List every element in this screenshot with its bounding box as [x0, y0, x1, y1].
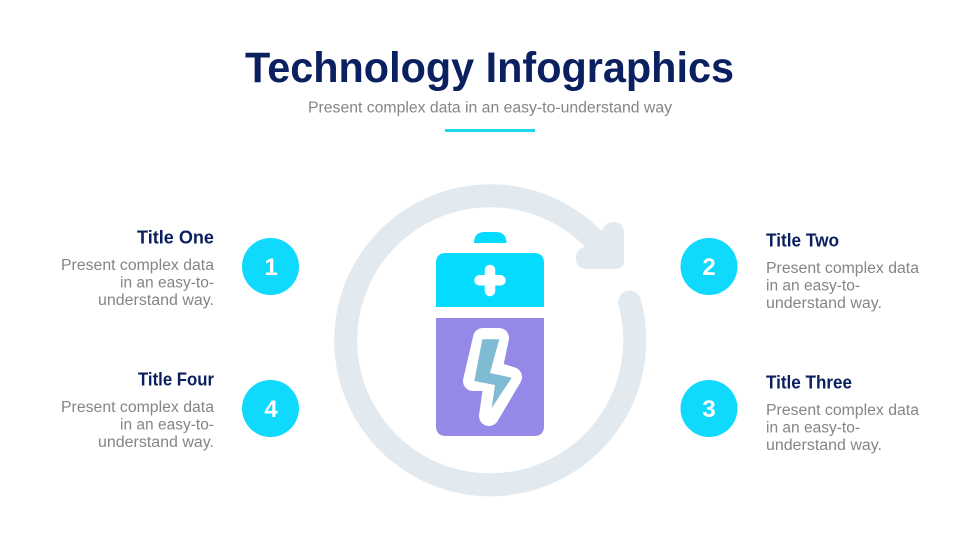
badge 2 — [680, 238, 738, 295]
battery terminal — [474, 232, 506, 243]
item 3 — [680, 372, 919, 454]
badge 1: 1 — [264, 254, 278, 281]
heading: title three: Title Three — [766, 372, 852, 392]
subtitle: Present complex data in an easy-to-understand way — [308, 100, 672, 116]
heading: title four: Title Four — [138, 368, 214, 390]
circular arrow — [346, 196, 635, 485]
text block: item 3 — [766, 402, 919, 454]
text block: item 4: Present complex data — [61, 399, 214, 416]
heading: title one: Title One — [137, 226, 214, 248]
title underline accent — [445, 129, 535, 132]
text block: item 4: understand way. — [98, 434, 214, 451]
badge 3: 3 — [702, 396, 716, 423]
badge 4: 4 — [264, 396, 278, 423]
text block: item 2: understand way. — [766, 295, 882, 312]
item 2 — [680, 230, 919, 312]
battery lower section — [436, 318, 544, 436]
text block: item 4 — [61, 399, 214, 451]
title: Technology Infographics — [245, 44, 734, 92]
text block: item 3: understand way. — [766, 437, 882, 454]
text block: item 2 — [766, 260, 919, 312]
text block: item 2: in an easy-to- — [766, 278, 860, 294]
battery top section — [436, 253, 544, 307]
item 4 — [61, 368, 299, 451]
icon: lightning bolt — [473, 338, 512, 416]
text block: item 3: in an easy-to- — [766, 420, 860, 436]
text block: item 1: Present complex data — [61, 257, 214, 274]
icon: plus sign — [480, 270, 500, 291]
badge 4 — [242, 380, 299, 437]
icon: battery — [436, 232, 544, 436]
text block: item 3: Present complex data — [766, 402, 919, 419]
text block: item 1 — [61, 257, 214, 309]
heading: title two: Title Two — [766, 230, 839, 250]
text block: item 4: in an easy-to- — [120, 416, 214, 434]
badge 2: 2 — [702, 254, 716, 281]
text block: item 2: Present complex data — [766, 260, 919, 277]
badge 1 — [242, 238, 299, 295]
text block: item 1: understand way. — [98, 292, 214, 309]
badge 3 — [680, 380, 738, 437]
item 1 — [61, 226, 299, 309]
text block: item 1: in an easy-to- — [120, 274, 214, 292]
